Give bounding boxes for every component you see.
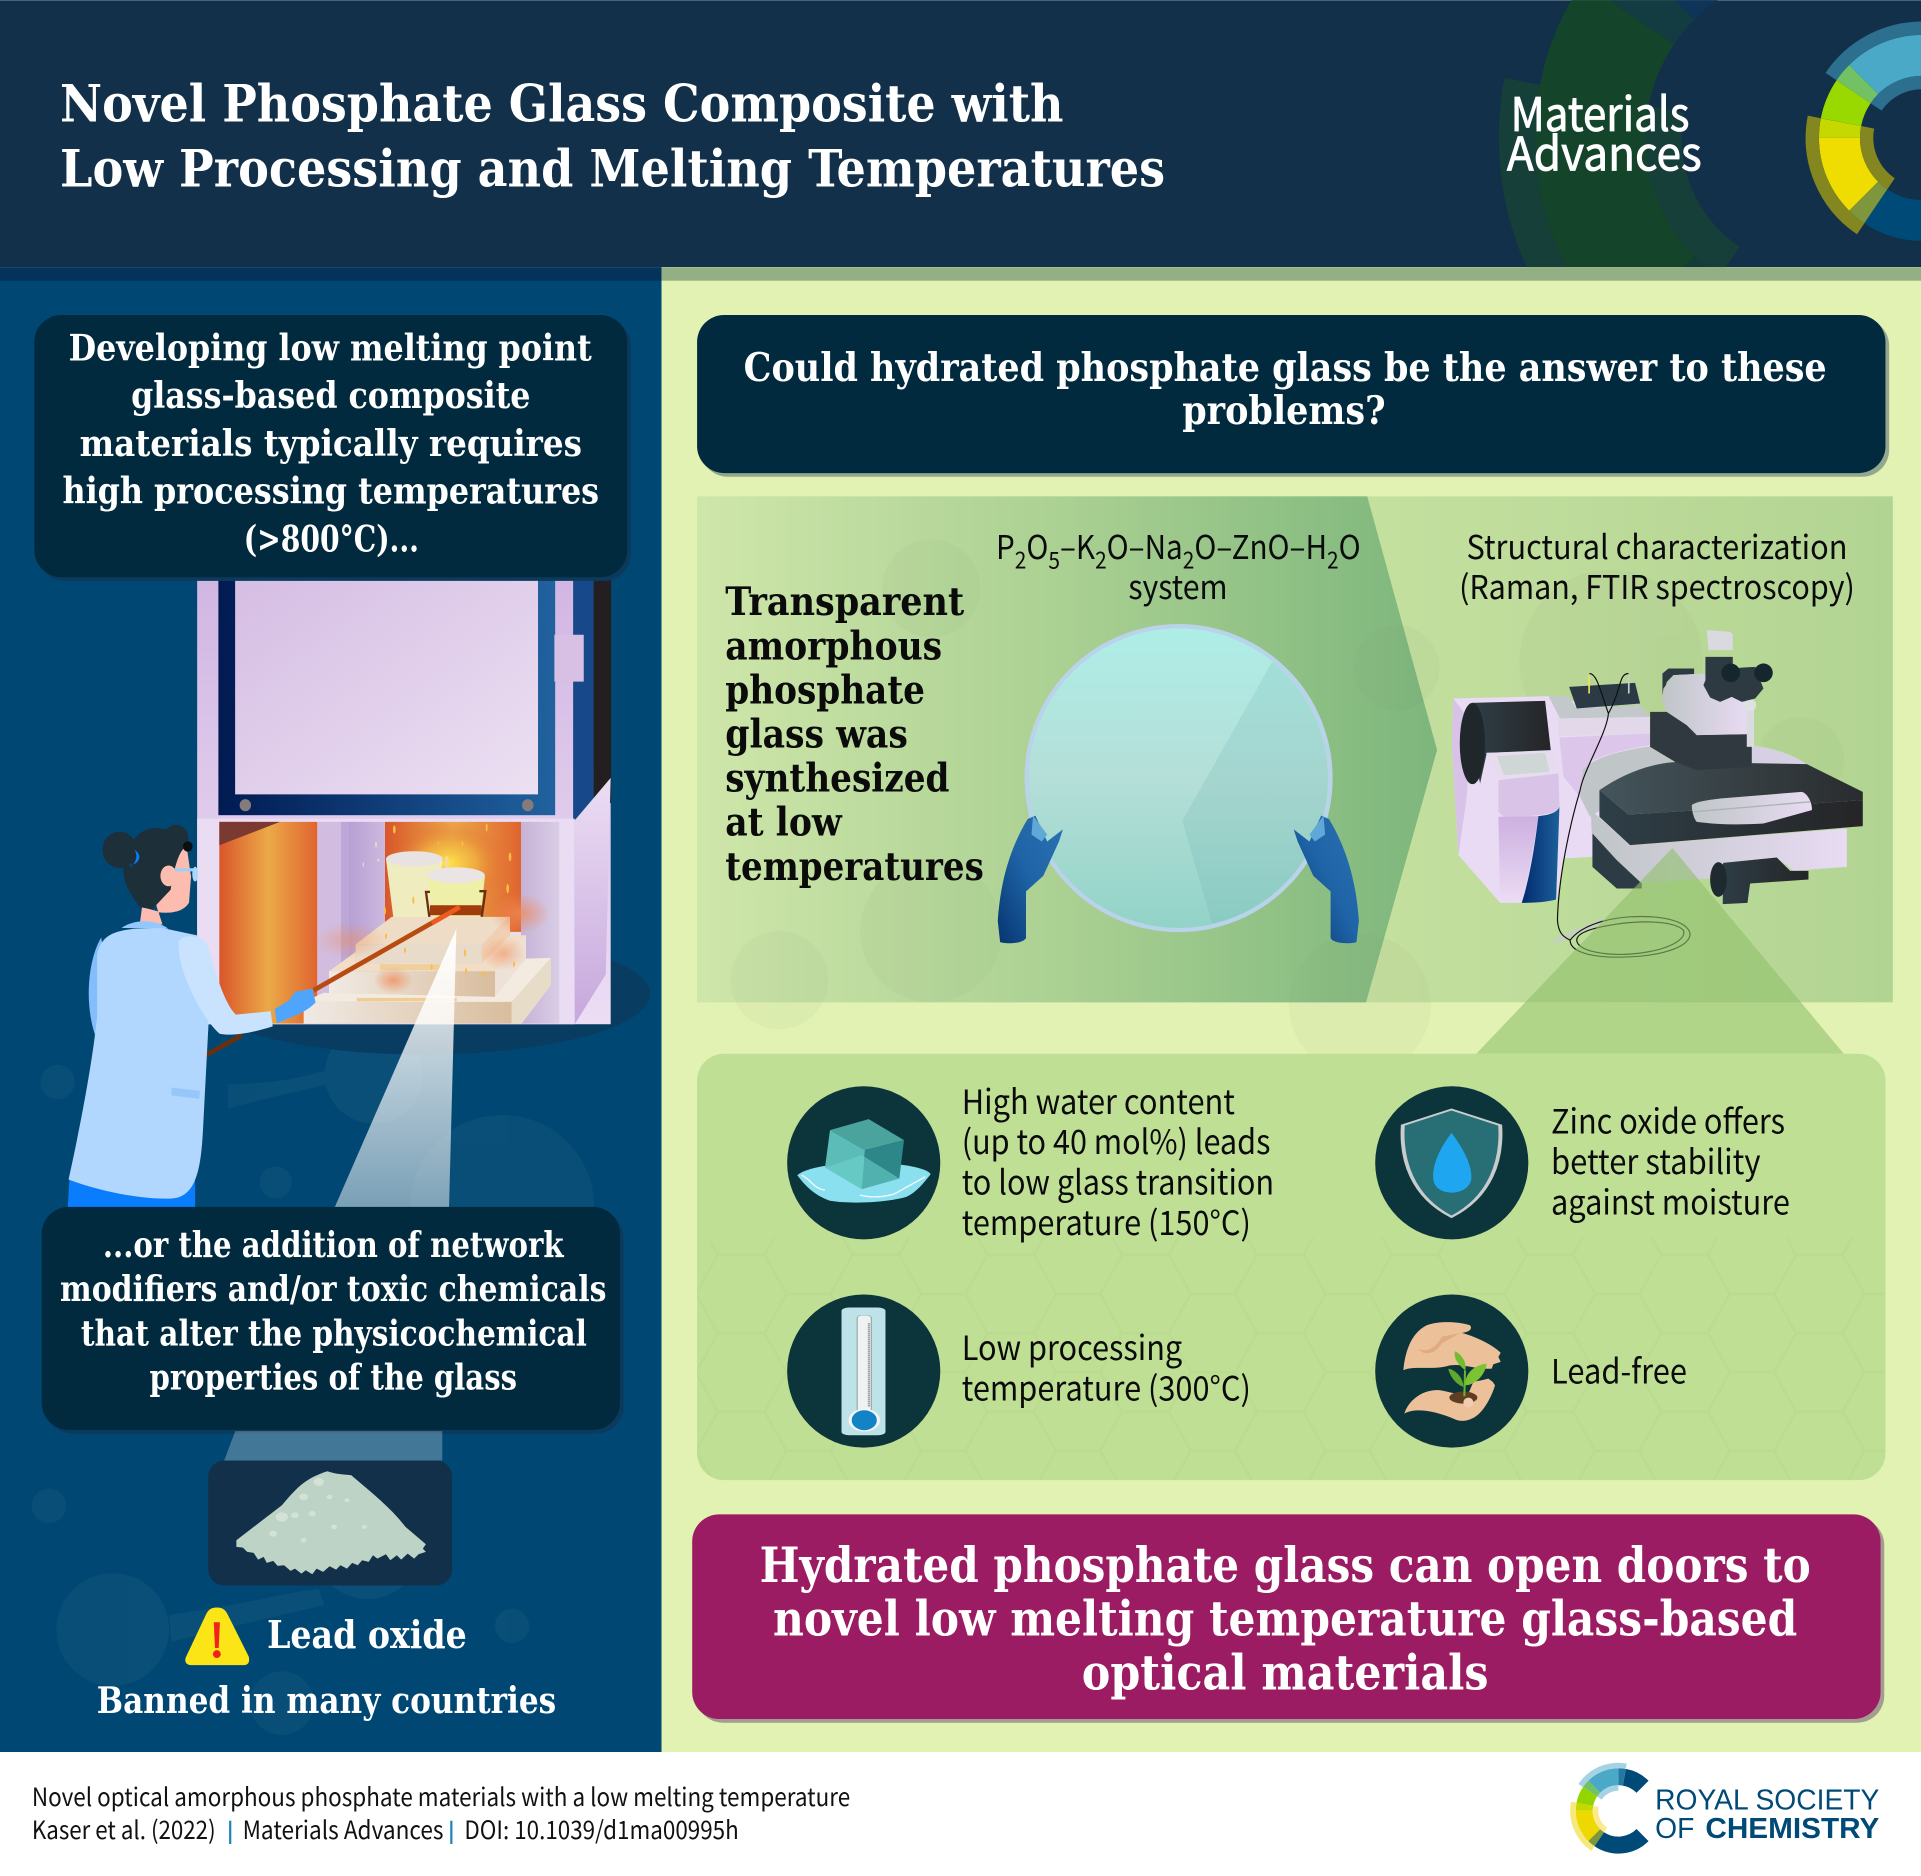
benefit: lead-free: Lead-free	[1551, 1344, 1687, 1393]
benefit: water content: temperature (150°C)	[962, 1196, 1251, 1245]
toxic chemicals caption box: ...or the addition of network	[103, 1225, 564, 1266]
furnace caption box	[34, 315, 631, 581]
conclusion box	[692, 1514, 1884, 1723]
citation: Materials Advances	[243, 1811, 443, 1847]
icon: shield with drop	[1375, 1086, 1528, 1239]
chemical system label: P	[996, 522, 1015, 569]
lead oxide label	[97, 1612, 556, 1722]
furnace caption box: glass-based composite	[131, 374, 530, 417]
chemical system label: O	[1339, 522, 1361, 569]
panel text: transparent amorphous glass: at low	[725, 800, 843, 846]
toxic chemicals caption box	[42, 1207, 624, 1434]
characterization label: Structural characterization	[1466, 521, 1847, 569]
warning icon	[185, 1608, 249, 1665]
icon: melting cube	[787, 1086, 940, 1239]
chemical system label: –K	[1060, 522, 1096, 569]
question box: Could hydrated phosphate glass be the answer to these	[744, 345, 1827, 391]
pointer triangle	[1476, 848, 1844, 1054]
panel text: transparent amorphous glass	[725, 579, 984, 890]
lead oxide label: Lead oxide	[267, 1612, 467, 1657]
chemical system label	[996, 522, 1361, 609]
firebrick steps	[304, 894, 551, 1024]
journal name: Materials Advances: Materials	[1511, 78, 1689, 145]
sparks	[363, 824, 515, 975]
glass disc held by gloves	[998, 626, 1359, 968]
citation: DOI: 10.1039/d1ma00995h	[464, 1811, 739, 1847]
furnace caption box: materials typically requires	[80, 422, 582, 465]
scientist	[68, 825, 316, 1207]
title	[60, 74, 1165, 199]
citation: Kaser et al. (2022)	[32, 1811, 216, 1847]
furnace caption box: high processing temperatures	[62, 470, 599, 513]
toxic chemicals caption box: that alter the physicochemical	[81, 1313, 587, 1354]
title: Low Processing and Melting Temperatures	[60, 139, 1165, 199]
benefit: zinc oxide: Zinc oxide offers	[1551, 1094, 1785, 1143]
lead oxide powder	[208, 1461, 452, 1585]
benefit: low processing temperature: Low processing	[962, 1321, 1182, 1370]
spectrometer microscope	[1452, 630, 1863, 957]
furnace caption box: (>800°C)...	[244, 517, 419, 560]
panel text: transparent amorphous glass: Transparent	[725, 579, 965, 625]
panel text: transparent amorphous glass: temperatures	[725, 844, 984, 890]
synthesis and characterization panel	[697, 496, 1893, 1076]
Royal Society of Chemistry logo: OF	[1655, 1813, 1694, 1845]
conclusion box: Hydrated phosphate glass can open doors to	[760, 1536, 1811, 1594]
chemical system label: O–Na	[1107, 522, 1183, 569]
arrow panel	[697, 496, 1437, 1002]
toxic chemicals caption box: modifiers and/or toxic chemicals	[60, 1269, 606, 1310]
panel text: transparent amorphous glass: amorphous	[725, 623, 942, 669]
icon: hands holding seedling	[1375, 1295, 1528, 1448]
conclusion box: novel low melting temperature glass-based	[773, 1590, 1797, 1648]
benefit: low processing temperature: temperature (300°C)	[962, 1361, 1251, 1410]
benefit: low processing temperature	[962, 1321, 1251, 1410]
chemical system label: system	[1128, 561, 1228, 609]
chemical system label: O	[1026, 522, 1048, 569]
iron rod	[205, 907, 460, 1055]
footer background	[0, 1752, 1921, 1876]
furnace chamber	[219, 822, 559, 1024]
chemical system label: O–ZnO–H	[1194, 522, 1327, 569]
chemical system label: 2	[1183, 542, 1194, 576]
benefit: water content	[962, 1075, 1274, 1245]
benefit: water content: High water content	[962, 1075, 1235, 1124]
header band	[0, 0, 1921, 268]
characterization label: (Raman, FTIR spectroscopy)	[1459, 561, 1855, 609]
furnace body	[197, 578, 611, 1024]
left panel background	[0, 267, 662, 1752]
citation	[32, 1778, 850, 1847]
journal name: Materials Advances	[1507, 78, 1702, 184]
benefits panel	[697, 1054, 1885, 1480]
chemical system label: 2	[1095, 542, 1107, 576]
toxic chemicals caption box: properties of the glass	[149, 1357, 517, 1398]
benefit: zinc oxide: against moisture	[1551, 1175, 1790, 1224]
benefit: water content: (up to 40 mol%) leads	[962, 1115, 1270, 1164]
Royal Society of Chemistry logo	[1573, 1765, 1879, 1849]
title: Novel Phosphate Glass Composite with	[60, 74, 1063, 134]
furnace caption box: Developing low melting point	[69, 326, 592, 369]
benefit: zinc oxide: better stability	[1551, 1135, 1761, 1184]
beam to powder	[224, 1431, 442, 1461]
Royal Society of Chemistry logo: ROYAL SOCIETY	[1655, 1785, 1879, 1817]
question box	[697, 315, 1889, 477]
conclusion box: optical materials	[1082, 1644, 1489, 1702]
chemical system label: 5	[1048, 542, 1060, 576]
benefit: zinc oxide	[1551, 1094, 1790, 1224]
chemical system label: 2	[1015, 542, 1026, 576]
citation: Novel optical amorphous phosphate materials with a low melting temperature	[32, 1778, 850, 1814]
light beam	[335, 929, 456, 1207]
journal logo ring	[1812, 28, 1921, 229]
chemical system label: 2	[1327, 542, 1339, 576]
panel text: transparent amorphous glass: phosphate	[725, 667, 925, 713]
floor shadow	[197, 933, 650, 1055]
Royal Society of Chemistry logo: CHEMISTRY	[1705, 1813, 1879, 1845]
question box: problems?	[1182, 388, 1386, 434]
benefit: water content: to low glass transition	[962, 1156, 1274, 1205]
panel text: transparent amorphous glass: glass was	[725, 711, 908, 757]
panel text: transparent amorphous glass: synthesized	[725, 756, 949, 802]
crucibles and tongs	[386, 851, 485, 940]
right panel background	[662, 267, 1921, 1752]
furnace illustration with scientist	[68, 578, 650, 1207]
characterization label	[1459, 521, 1855, 609]
icon: thermometer	[787, 1295, 940, 1448]
journal name: Materials Advances: Advances	[1507, 117, 1702, 184]
lead oxide label: Banned in many countries	[97, 1679, 556, 1722]
